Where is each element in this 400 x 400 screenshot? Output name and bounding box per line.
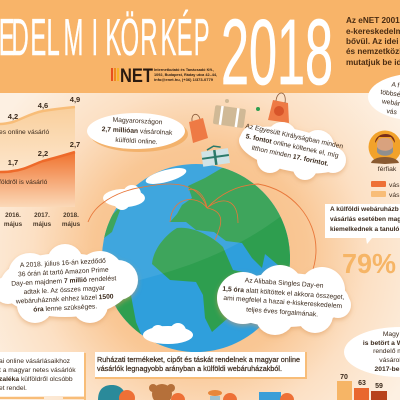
globe shading [102, 164, 280, 280]
line chart: 2016. [5, 212, 21, 219]
cloud: Amazon: A 2018. július 16-án kezdődő [20, 258, 106, 269]
callout: cheaper abroad: zaléka külföldről olcsóbb [0, 376, 73, 383]
big number: 79% [342, 248, 396, 279]
intro text: és nemzetközi [346, 47, 400, 56]
icon: orange bag [268, 93, 289, 123]
callout: foreign webshops: A külföldi webáruházb [330, 206, 399, 213]
bar chart: 59 [375, 383, 383, 390]
cloud: top right oval: A f [391, 81, 400, 89]
trade routes [143, 184, 238, 240]
orbit arc [88, 184, 316, 298]
icon: gift [201, 144, 230, 167]
cloud: UK: Az Egyesült Királyságban minden [245, 123, 344, 151]
icon: teddy bear [149, 384, 185, 400]
continents [170, 166, 296, 268]
intro text: Az eNET 2001 [346, 16, 400, 25]
icon: shopping bag [189, 114, 208, 143]
cloud: Alibaba: Az Alibaba Singles Day-en [245, 277, 324, 290]
bar chart [337, 374, 387, 400]
line chart: es online vásárló [0, 129, 49, 136]
globe [100, 160, 296, 352]
line chart: május [33, 221, 52, 228]
cloud: Hungary bottom right: Magy [383, 331, 400, 338]
cloud: Hungarian shoppers [87, 113, 188, 152]
cloud: Hungary bottom right: 2017-be [375, 366, 400, 373]
globe polar cloud [144, 165, 188, 187]
line chart: 1,7 [8, 158, 18, 167]
cloud: Amazon: adtak le. Az összes magyar [23, 285, 106, 296]
cloud: Amazon: 36 órán át tartó Amazon Prime [18, 267, 109, 278]
icon: suitcase [213, 105, 246, 128]
bar chart: 63 [358, 380, 366, 387]
cloud: Hungarian shoppers: külföldi online. [115, 137, 158, 146]
cloud: top right oval: vás [386, 108, 398, 116]
line chart: 2018. [63, 212, 79, 219]
line chart: 2017. [34, 212, 50, 219]
legend: vás [389, 192, 400, 199]
logo: Internetkutató és Tanácsadó Kft., [154, 68, 214, 72]
title: EDELMI KÖRKÉP [0, 7, 210, 67]
logo [111, 66, 217, 87]
line chart: földről is vásárló [0, 179, 48, 186]
logo: 1092, Budapest, Ráday utca 42–44, [154, 73, 217, 77]
globe left cloud [103, 185, 145, 210]
legend: vás [389, 182, 400, 189]
callout: foreign webshops: kiemelkednek a tanuló [330, 226, 399, 233]
cloud: Amazon: óra lenne szükséges. [33, 303, 97, 314]
bar chart: 70 [340, 374, 348, 381]
cloud: Amazon: Day-en majdnem 7 millió rendelést [11, 275, 117, 288]
cloud: Hungary bottom right [344, 327, 400, 377]
line chart: 4,2 [8, 112, 18, 121]
callout: cheaper abroad [0, 352, 86, 400]
icon: blue box [259, 392, 294, 400]
intro text: mutatjuk be id [346, 58, 400, 67]
cloud: top right oval [368, 73, 400, 121]
cloud: Amazon: webáruháznak ehhez közel 1500 [15, 293, 114, 306]
logo: NET [120, 66, 153, 87]
icon: jacket [98, 385, 135, 400]
cloud: Alibaba: 1,5 óra alatt költöttek el akkora összeget, [222, 286, 345, 301]
cloud: UK [235, 118, 349, 182]
callout: clothing: Ruházati termékeket, cipőt és táskát rendelnek a magyar online [97, 357, 300, 364]
callout: cheaper abroad: ai online vásárlásaikhoz [0, 358, 71, 365]
intro text [346, 16, 400, 67]
line chart: 4,9 [70, 95, 80, 104]
cloud: Alibaba: ami megfelel a hazai e-kiskereskedelem [223, 295, 343, 310]
callout: foreign webshops: vásárlás esetében mag [330, 216, 400, 223]
globe bottom cloud [143, 323, 193, 344]
intro text: bővül. Az idei [346, 37, 398, 46]
cloud: UK: itthon minden 17. forintot. [251, 145, 329, 168]
line chart [0, 95, 81, 228]
callout: foreign webshops [325, 204, 400, 244]
header band [0, 0, 400, 104]
line chart: 2,2 [38, 149, 48, 158]
callout: clothing: vásárlók legnagyobb arányban a külföldi webáruházakból. [97, 366, 282, 373]
line chart: 4,6 [38, 101, 48, 110]
cloud: Alibaba: teljes éves forgalmának. [246, 306, 318, 318]
cloud: Hungarian shoppers: 2,7 millióan vásárolnak [102, 126, 173, 137]
line chart: 2,7 [70, 140, 80, 149]
label: men: férfiak [378, 166, 397, 173]
legend [371, 181, 400, 199]
callout: cheaper abroad: t a magyar netes vásárlók [0, 367, 76, 374]
line chart: május [62, 221, 81, 228]
cloud: UK: 5. fontot online költenek el, míg [245, 133, 339, 160]
icon: shoes [208, 390, 237, 400]
cloud: Hungarian shoppers: Magyarországon [112, 117, 163, 126]
logo: info@enet.hu, (+36) 1/373-0779 [154, 78, 213, 82]
icon: man [368, 130, 400, 164]
line chart: május [4, 221, 23, 228]
cloud: Amazon [0, 244, 138, 323]
callout: clothing [95, 352, 307, 379]
cloud: Alibaba [217, 265, 351, 335]
